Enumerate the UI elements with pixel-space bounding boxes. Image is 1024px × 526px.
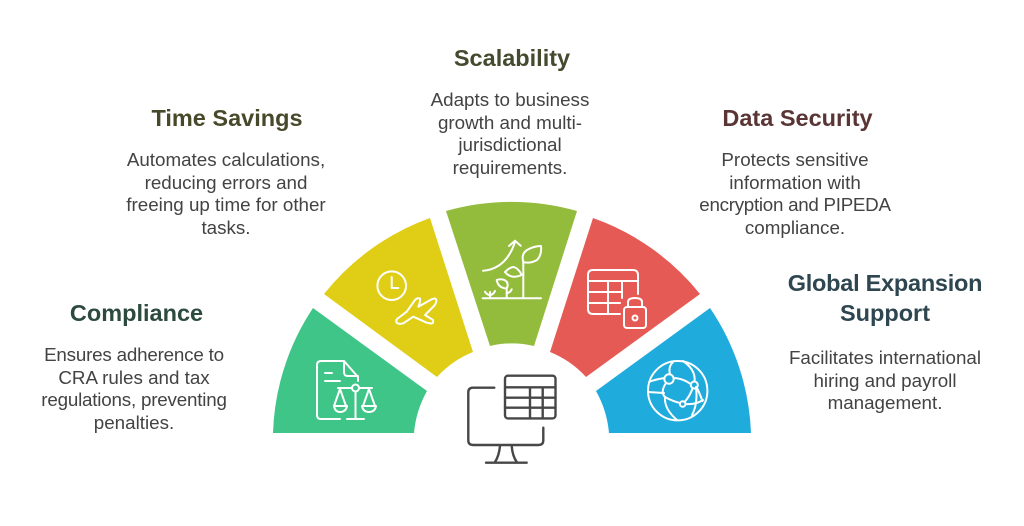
compliance description: regulations, preventing bbox=[41, 389, 227, 410]
time savings description: Automates calculations, bbox=[127, 149, 325, 170]
center icon: computer with table bbox=[468, 376, 556, 463]
compliance description: penalties. bbox=[94, 412, 174, 433]
compliance description: CRA rules and tax bbox=[58, 367, 210, 388]
global expansion description: management. bbox=[828, 392, 942, 413]
global expansion description: hiring and payroll bbox=[813, 370, 957, 391]
icon: clock and plane bbox=[377, 271, 436, 324]
data security description: Protects sensitive bbox=[721, 149, 869, 170]
scalability heading: Scalability bbox=[454, 45, 570, 71]
data security description bbox=[699, 149, 891, 238]
icon: growing plants bbox=[483, 241, 541, 298]
global expansion heading: Global Expansion bbox=[788, 270, 982, 296]
data security description: information with bbox=[729, 172, 861, 193]
scalability description bbox=[430, 89, 589, 178]
scalability description: Adapts to business bbox=[431, 89, 589, 110]
global expansion description: Facilitates international bbox=[789, 347, 981, 368]
segment: compliance bbox=[273, 308, 427, 433]
data security heading: Data Security bbox=[722, 105, 873, 131]
global expansion description bbox=[789, 347, 981, 413]
icon: table with lock bbox=[588, 270, 646, 328]
time savings description bbox=[126, 149, 326, 238]
compliance description bbox=[41, 344, 227, 433]
time savings description: tasks. bbox=[201, 217, 251, 238]
global expansion heading: Support bbox=[840, 300, 930, 326]
icon: document with scales bbox=[317, 361, 376, 419]
scalability description: growth and multi- bbox=[438, 112, 582, 133]
data security description: compliance. bbox=[745, 217, 845, 238]
compliance description: Ensures adherence to bbox=[44, 344, 224, 365]
compliance heading: Compliance bbox=[70, 300, 203, 326]
time savings description: freeing up time for other bbox=[126, 194, 326, 215]
time savings heading: Time Savings bbox=[151, 105, 303, 131]
scalability description: jurisdictional bbox=[458, 134, 562, 155]
global expansion heading bbox=[788, 270, 982, 326]
data security description: encryption and PIPEDA bbox=[699, 194, 891, 215]
icon: globe network bbox=[648, 361, 707, 420]
segment: scalability bbox=[446, 202, 577, 346]
segment: global expansion bbox=[596, 308, 751, 433]
segment: time savings bbox=[324, 218, 473, 377]
scalability description: requirements. bbox=[453, 157, 567, 178]
segment: data security bbox=[550, 218, 700, 377]
time savings description: reducing errors and bbox=[145, 172, 307, 193]
